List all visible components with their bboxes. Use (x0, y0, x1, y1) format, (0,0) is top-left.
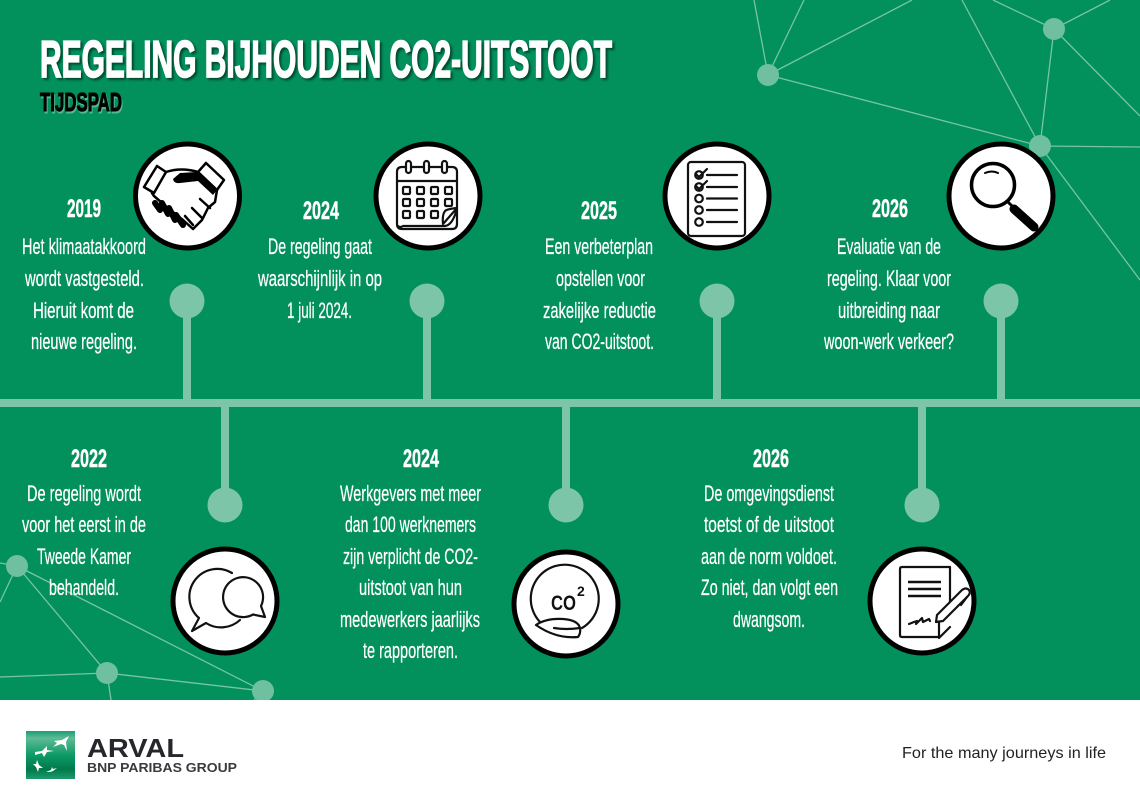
network decoration: bottom left (0, 555, 274, 702)
milestone 2019: 2019 (67, 195, 101, 223)
milestone 2024 top (257, 197, 382, 323)
icon: signed document (870, 549, 974, 653)
milestone 2024 bottom: dan 100 werknemers (345, 512, 476, 537)
wordmark: ARVAL (87, 733, 184, 763)
milestone 2026 top: uitbreiding naar (838, 298, 940, 323)
milestone 2025: opstellen voor (556, 266, 645, 291)
milestone 2019: Hieruit komt de (33, 298, 134, 323)
milestone 2026 top: woon-werk verkeer? (823, 329, 954, 354)
icon: CO2 leaf: CO (551, 592, 576, 615)
milestone 2025: zakelijke reductie (543, 298, 656, 323)
milestone 2019: nieuwe regeling. (31, 329, 137, 354)
milestone 2026 top (823, 195, 954, 354)
milestone 2026 top: 2026 (872, 195, 908, 223)
milestone 2025: van CO2-uitstoot. (545, 329, 654, 354)
milestone 2025: 2025 (581, 197, 617, 225)
milestone 2026 bottom: Zo niet, dan volgt een (701, 575, 838, 600)
milestone 2022: 2022 (71, 445, 107, 473)
tagline: For the many journeys in life (902, 745, 1106, 762)
milestone 2024 top: De regeling gaat (268, 234, 372, 259)
milestone 2026 top: regeling. Klaar voor (827, 266, 951, 291)
milestone 2024 bottom (340, 445, 481, 663)
milestone 2024 bottom: 2024 (403, 445, 439, 473)
milestone 2024 bottom: uitstoot van hun (359, 575, 462, 600)
milestone 2026 top: Evaluatie van de (837, 234, 941, 259)
milestone 2025: Een verbeterplan (545, 234, 653, 259)
icon: CO2 leaf: 2 (577, 583, 585, 599)
milestone 2024 top: 2024 (303, 197, 339, 225)
milestone 2026 bottom: dwangsom. (733, 607, 805, 632)
network decoration: top right (754, 0, 1140, 280)
milestone 2024 bottom: zijn verplicht de CO2- (343, 544, 478, 569)
milestone 2024 bottom: te rapporteren. (363, 638, 458, 663)
milestone 2026 bottom (701, 445, 838, 632)
milestone 2026 bottom: De omgevingsdienst (704, 481, 834, 506)
milestone 2019: Het klimaatakkoord (22, 234, 146, 259)
milestone 2026 bottom: aan de norm voldoet. (701, 544, 837, 569)
milestone 2024 top: 1 juli 2024. (287, 298, 352, 323)
icon: CO2 leaf (514, 552, 618, 656)
icon: calendar (376, 144, 480, 248)
logo square with stars (26, 731, 75, 779)
footer logo: ARVAL BNP Paribas (26, 731, 237, 779)
milestone 2022: behandeld. (49, 575, 119, 600)
milestone 2022: Tweede Kamer (37, 544, 131, 569)
milestone 2019 (22, 195, 146, 354)
milestone 2025 (543, 197, 656, 354)
icon: handshake (136, 144, 240, 248)
timeline axis with stems and knobs (0, 284, 1140, 522)
milestone 2024 bottom: Werkgevers met meer (340, 481, 481, 506)
milestone 2019: wordt vastgesteld. (24, 266, 144, 291)
milestone 2022: De regeling wordt (27, 481, 141, 506)
milestone 2022 (22, 445, 146, 600)
milestone 2026 bottom: 2026 (753, 445, 789, 473)
milestone 2026 bottom: toetst of de uitstoot (704, 512, 834, 537)
title: REGELING BIJHOUDEN CO2-UITSTOOT (40, 31, 612, 89)
milestone 2024 top: waarschijnlijk in op (257, 266, 382, 291)
milestone 2022: voor het eerst in de (22, 512, 146, 537)
group line: BNP PARIBAS GROUP (87, 760, 237, 775)
white footer band (0, 700, 1140, 806)
icon: checklist (665, 144, 769, 248)
icon: speech bubbles (173, 549, 277, 653)
milestone 2024 bottom: medewerkers jaarlijks (340, 607, 480, 632)
icon: magnifying glass (949, 144, 1053, 248)
subtitle: TIJDSPAD (40, 87, 122, 117)
